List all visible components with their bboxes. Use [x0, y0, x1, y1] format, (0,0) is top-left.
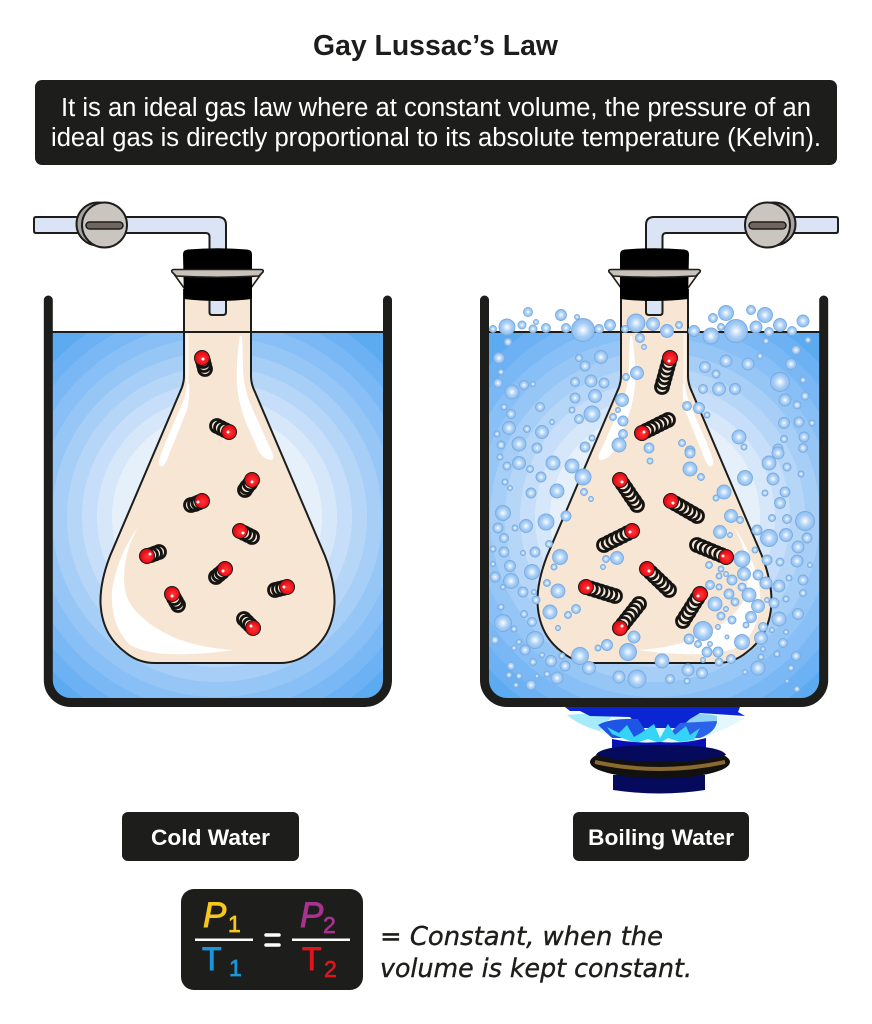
right beaker	[484, 300, 824, 702]
flask flare	[174, 274, 261, 288]
formula caption	[380, 922, 692, 984]
right apparatus: flask in boiling water	[484, 202, 838, 702]
right pale flame lobe	[680, 714, 717, 724]
beaker	[48, 300, 388, 702]
cyan flame tips	[607, 724, 700, 743]
formula caption: volume is kept constant.	[380, 954, 692, 984]
flask	[100, 290, 335, 663]
mid blue flame, left	[598, 719, 655, 738]
subscript 1 on T1: 1	[229, 955, 242, 981]
cold gas molecules	[140, 350, 294, 636]
outer pale flame	[580, 712, 745, 745]
gas burner	[565, 707, 745, 794]
right water surface line	[488, 331, 820, 333]
definition box: It is an ideal gas law where at constant volume, the pressure of an	[61, 94, 811, 122]
gas tube	[34, 217, 226, 315]
right flask	[537, 290, 772, 663]
label: boiling water: Boiling Water	[588, 825, 734, 850]
mid blue flame, right	[665, 721, 717, 738]
subscript 2 on P2: 2	[323, 912, 336, 938]
boiling water bubbles	[490, 306, 815, 692]
label: cold water	[122, 812, 299, 861]
right neck highlight sliver	[684, 334, 686, 384]
right water line inside flask	[621, 331, 688, 333]
right flask lip	[609, 270, 700, 277]
left apparatus: flask in cold water	[34, 202, 388, 702]
flask highlights	[112, 336, 274, 654]
label: cold water: Cold Water	[151, 825, 270, 850]
hot gas molecules	[578, 350, 734, 636]
label: boiling water	[573, 812, 749, 861]
T2: T	[302, 941, 322, 977]
brass stripe	[595, 762, 725, 769]
valve	[76, 202, 127, 248]
stopper	[183, 248, 252, 301]
flask lip	[172, 270, 263, 277]
right valve	[745, 202, 796, 248]
right flask highlights	[598, 336, 760, 654]
water line inside flask	[184, 331, 251, 333]
formula caption: = Constant, when the	[380, 922, 663, 952]
fraction line 2	[292, 938, 350, 941]
definition box: ideal gas is directly proportional to its absolute temperature (Kelvin).	[51, 124, 821, 152]
formula box	[181, 889, 363, 990]
right stopper	[620, 248, 689, 301]
burner top plate	[596, 745, 726, 762]
fraction line 1	[195, 938, 253, 941]
neck highlight sliver	[186, 334, 188, 384]
P2: P	[300, 896, 324, 935]
burner head	[612, 738, 706, 752]
subscript 1 on P1: 1	[228, 911, 241, 937]
P1: P	[203, 896, 227, 935]
equals sign	[266, 935, 279, 945]
right gas tube	[646, 217, 838, 315]
burner ring	[590, 746, 730, 778]
T1: T	[202, 941, 222, 977]
definition box	[35, 80, 837, 165]
title: Gay Lussac’s Law	[313, 30, 559, 62]
dark upper flame	[565, 707, 745, 728]
burner base	[613, 775, 705, 794]
cold water	[50, 332, 385, 700]
subscript 2 on T2: 2	[324, 956, 337, 982]
right flask flare	[611, 274, 698, 288]
boiling water	[487, 332, 822, 700]
water surface line	[52, 331, 384, 333]
left pale flame lobe	[567, 714, 612, 731]
